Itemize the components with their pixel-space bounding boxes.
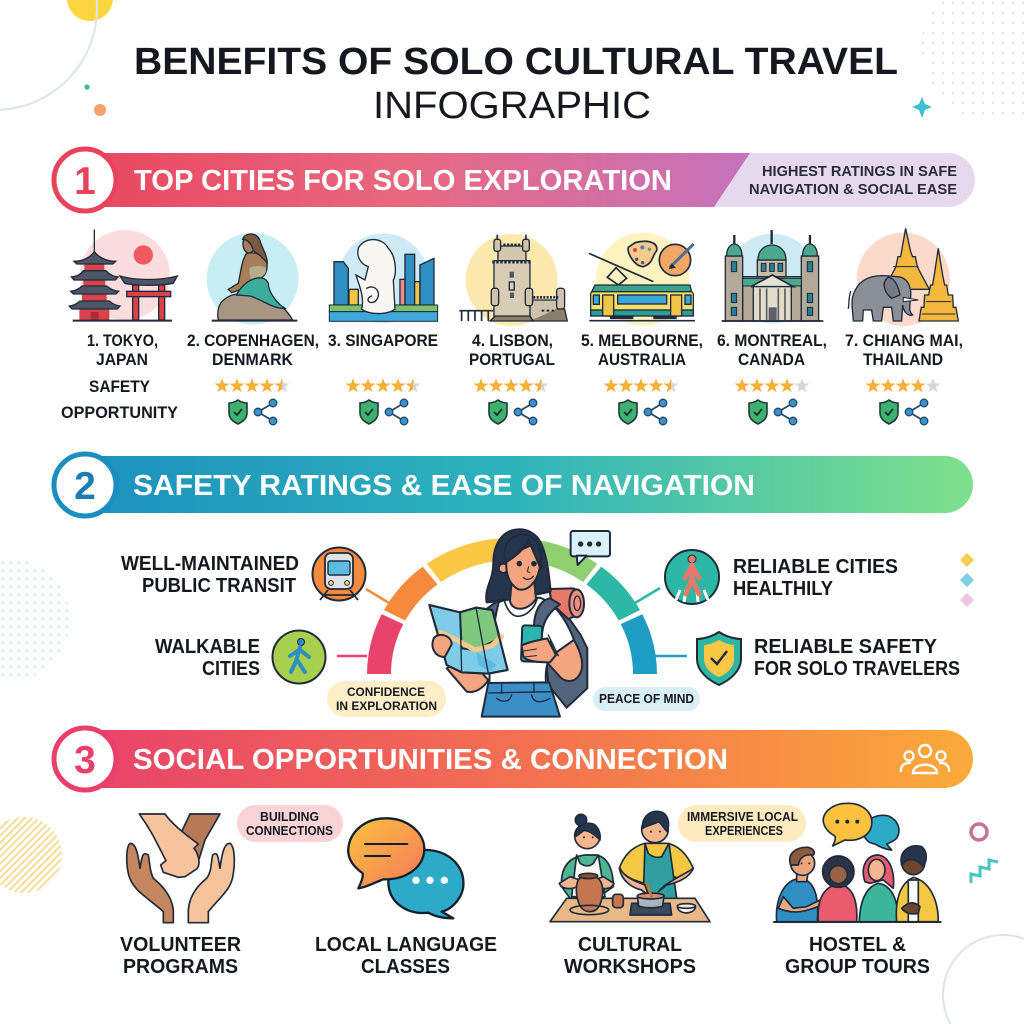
city labels: 1. TOKYO, (87, 332, 158, 350)
text: reliable cities healthily: RELIABLE CITIES (733, 556, 898, 578)
icon: Montreal basilica (722, 230, 823, 324)
callout: immersive local experiences (678, 805, 806, 842)
section 1 banner: 1 (74, 160, 96, 203)
icon: Lisbon Belem tower (459, 234, 567, 326)
callout: confidence in exploration (327, 681, 446, 717)
text: cultural workshops (564, 934, 696, 978)
text: reliable safety for solo travelers (754, 636, 960, 680)
text: reliable safety for solo travelers: FOR SOLO TRAVELERS (754, 658, 960, 680)
text: walkable cities: CITIES (202, 658, 260, 680)
icon: people group (901, 745, 949, 773)
text: walkable cities (155, 636, 260, 680)
text: cultural workshops: CULTURAL (578, 934, 682, 956)
icon: Chiang Mai elephant and stupas (848, 228, 958, 326)
callout: immersive local experiences: EXPERIENCES (705, 824, 783, 838)
text: volunteer programs: PROGRAMS (123, 956, 238, 978)
city labels: THAILAND (863, 351, 943, 369)
panel: navigation gauge (121, 529, 960, 717)
section 2 banner: 2 (74, 465, 96, 508)
callout: peace of mind (593, 687, 700, 711)
section 2 banner: SAFETY RATINGS & EASE OF NAVIGATION (133, 470, 755, 502)
text: reliable safety for solo travelers: RELIABLE SAFETY (754, 636, 938, 658)
icon: pottery and cooking workshop (550, 811, 710, 922)
city labels: PORTUGAL (469, 351, 555, 369)
icon: helping hands (127, 814, 234, 923)
section 2 banner (52, 454, 973, 516)
city labels: DENMARK (212, 351, 293, 369)
section 1 banner (52, 149, 975, 211)
callout: building connections: BUILDING (260, 810, 319, 824)
icon: Tokyo pagoda and torii (69, 230, 177, 321)
text: hostel and group tours (785, 934, 930, 978)
text: local language classes: LOCAL LANGUAGE (315, 934, 497, 956)
section 1 banner: NAVIGATION & SOCIAL EASE (749, 182, 957, 198)
text: volunteer programs: VOLUNTEER (120, 934, 242, 956)
city labels: 6. MONTREAL, (717, 332, 827, 350)
callout: building connections: CONNECTIONS (246, 824, 333, 838)
city labels: 7. CHIANG MAI, (845, 332, 963, 350)
callout: confidence in exploration: IN EXPLORATION (336, 699, 437, 713)
title: BENEFITS OF SOLO CULTURAL TRAVEL (134, 41, 898, 83)
text: walkable cities: WALKABLE (155, 636, 260, 658)
icon: walking person (272, 630, 326, 684)
city labels: SAFETY (89, 378, 150, 396)
text: well-maintained public transit: WELL-MAINTAINED (121, 553, 299, 575)
callout: building connections (237, 805, 343, 842)
section 1 banner: TOP CITIES FOR SOLO EXPLORATION (134, 165, 672, 197)
text: hostel and group tours: GROUP TOURS (785, 956, 930, 978)
section 3 banner: 3 (74, 739, 96, 782)
callout: immersive local experiences: IMMERSIVE LOCAL (687, 810, 798, 824)
icon: train (312, 548, 366, 600)
title (134, 41, 898, 127)
city labels: JAPAN (96, 351, 148, 369)
city labels: AUSTRALIA (598, 351, 686, 369)
icon: Singapore merlion skyline (329, 233, 438, 323)
panel: top cities (61, 228, 963, 425)
safety star ratings (215, 378, 940, 392)
icon: Copenhagen mermaid (207, 233, 299, 325)
panel: social opportunities (120, 803, 941, 978)
icon: Melbourne tram and palette (589, 233, 695, 326)
text: volunteer programs (120, 934, 242, 978)
text: local language classes: CLASSES (361, 956, 450, 978)
section 3 banner (52, 728, 973, 790)
city labels: 2. COPENHAGEN, (187, 332, 319, 350)
icon: speech bubbles (348, 818, 463, 918)
city labels: 5. MELBOURNE, (581, 332, 703, 350)
icon: safety shield (697, 632, 741, 685)
city labels: CANADA (738, 351, 805, 369)
section 1 banner: HIGHEST RATINGS IN SAFE (762, 164, 957, 180)
title: INFOGRAPHIC (373, 85, 651, 127)
text: local language classes (315, 934, 497, 978)
callout: confidence in exploration: CONFIDENCE (347, 685, 425, 699)
text: well-maintained public transit: PUBLIC TRANSIT (142, 575, 296, 597)
icon: crossing pedestrian (665, 550, 719, 604)
text: cultural workshops: WORKSHOPS (564, 956, 696, 978)
text: reliable cities healthily: HEALTHILY (733, 578, 834, 600)
city labels: 4. LISBON, (472, 332, 553, 350)
text: reliable cities healthily (733, 556, 898, 600)
text: well-maintained public transit (121, 553, 299, 597)
text: hostel and group tours: HOSTEL & (809, 934, 906, 956)
illustration: traveler with map (429, 529, 610, 717)
opportunity shield and network icons (229, 399, 928, 425)
icon: hostel group with chat bubbles (774, 803, 941, 922)
city labels: 3. SINGAPORE (328, 332, 438, 350)
callout: peace of mind: PEACE OF MIND (599, 692, 694, 706)
gauge arc (379, 549, 645, 674)
city labels (61, 332, 963, 422)
section 3 banner: SOCIAL OPPORTUNITIES & CONNECTION (133, 744, 728, 776)
city labels: OPPORTUNITY (61, 404, 178, 422)
gauge connectors (337, 588, 687, 656)
